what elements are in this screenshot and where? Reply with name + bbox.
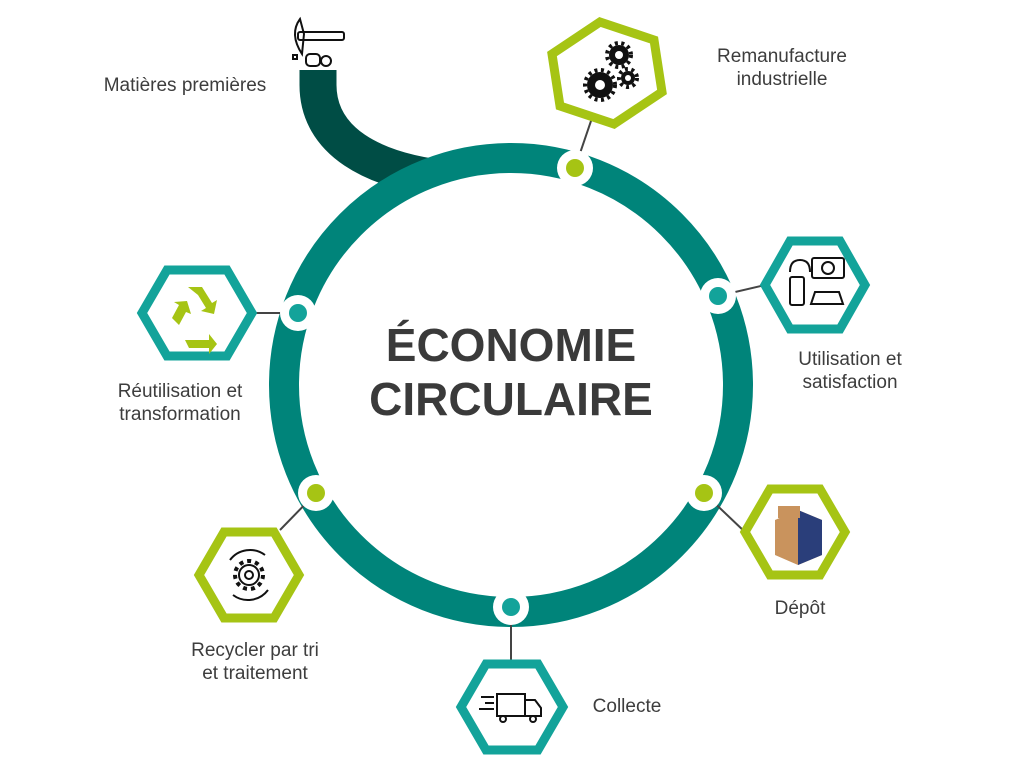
hex: box <box>745 489 845 575</box>
label: utilisation: satisfaction <box>802 372 898 393</box>
label: collecte: Collecte <box>593 696 661 717</box>
label: remanufacture <box>717 46 847 90</box>
label: dépôt: Dépôt <box>775 598 825 619</box>
icon: pickaxe <box>293 19 344 66</box>
label: réutilisation <box>118 381 242 425</box>
hex: truck <box>461 664 563 750</box>
label: recycler: et traitement <box>202 663 308 684</box>
hex: gears <box>552 22 662 124</box>
label: réutilisation: transformation <box>119 404 241 425</box>
label: utilisation: Utilisation et <box>798 349 902 370</box>
hex: recycle <box>142 270 252 356</box>
title: CIRCULAIRE <box>369 373 653 425</box>
hex: devices <box>765 241 865 329</box>
label: recycler: Recycler par tri <box>191 640 319 661</box>
title <box>369 319 653 425</box>
label: matières: Matières premières <box>104 75 266 96</box>
title: ÉCONOMIE <box>386 319 636 371</box>
label: recycler <box>191 640 319 684</box>
label: remanufacture: industrielle <box>737 69 827 90</box>
main ring <box>284 158 738 612</box>
raw material arc <box>318 70 455 180</box>
hex: recycle gear <box>199 532 299 618</box>
ring dots <box>280 150 736 625</box>
label: remanufacture: Remanufacture <box>717 46 847 67</box>
label: réutilisation: Réutilisation et <box>118 381 242 402</box>
label: utilisation <box>798 349 902 393</box>
connectors <box>250 118 765 662</box>
